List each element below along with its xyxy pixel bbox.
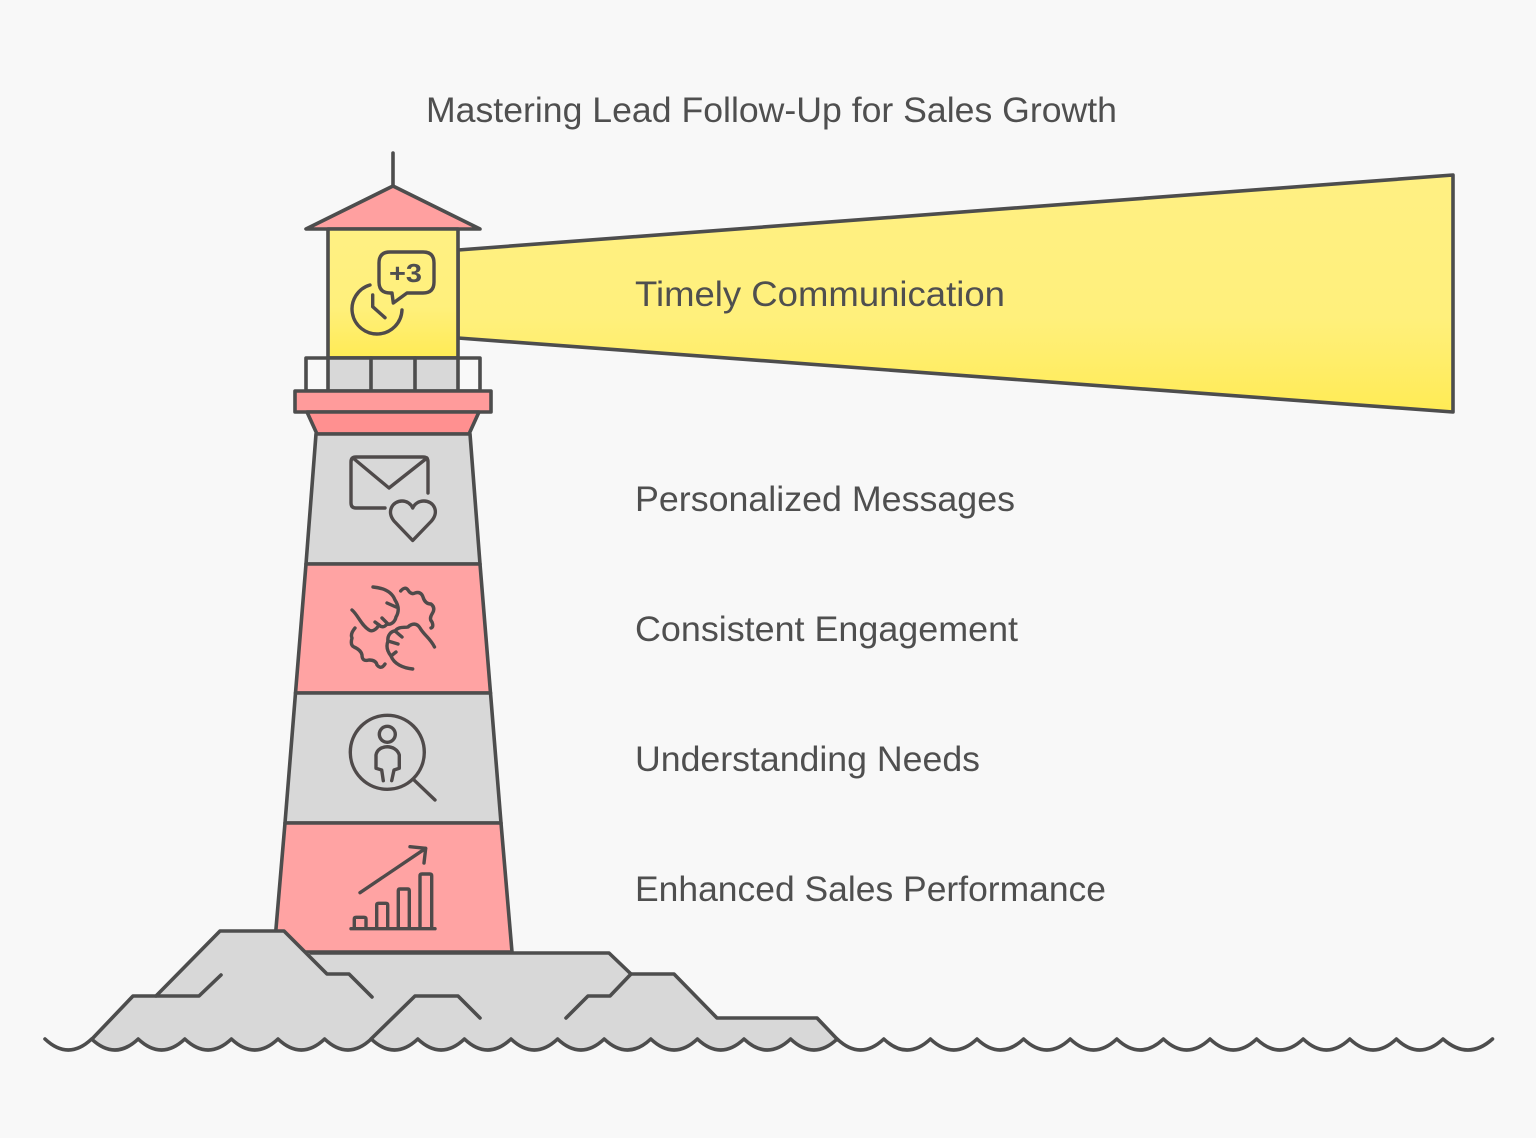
tower band: pink upper [296,564,490,693]
title: Mastering Lead Follow-Up for Sales Growth [426,91,1117,130]
icon: clasped hands [351,587,434,669]
icon: magnifier with person [350,715,435,800]
rocky island [92,931,838,1050]
roof [306,186,480,229]
label: Personalized Messages: Personalized Messages [635,480,1015,519]
gallery platform [295,391,491,412]
antenna [391,153,395,186]
tower band: gray top [306,434,480,564]
gallery railing [306,358,480,391]
tower band: gray lower [285,693,501,823]
rock mass [92,931,838,1050]
rock outlines [92,931,372,1039]
icon: growth bar chart with arrow [351,847,435,929]
lantern room [328,229,458,358]
label: Enhanced Sales Performance: Enhanced Sales Performance [635,870,1106,909]
icon: envelope with heart [351,457,435,540]
light beam [458,175,1453,412]
label: Consistent Engagement: Consistent Engagement [635,610,1018,649]
tower band: pink base [274,823,512,952]
platform support [307,412,479,434]
label: Understanding Needs: Understanding Needs [635,740,980,779]
water waves [45,1039,1492,1050]
icon: clock and +3 speech bubble [352,252,434,334]
lighthouse [274,153,512,952]
icon: clock and +3 speech bubble: +3 [389,258,422,288]
label: Timely Communication: Timely Communication [635,275,1005,314]
